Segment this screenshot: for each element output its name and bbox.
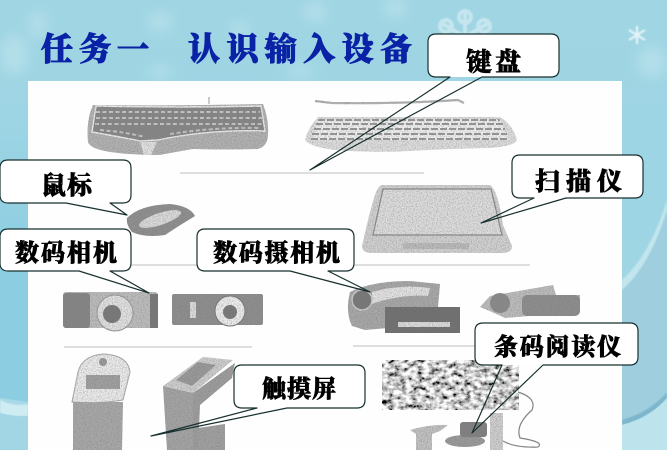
callout: 触摸屏: 触摸屏 [262, 375, 336, 403]
illustration: compact camera 1 [63, 292, 158, 331]
callout: 数码摄相机: 数码摄相机 [213, 239, 340, 267]
illustration: ergonomic keyboard [88, 97, 268, 155]
illustration: camcorder 1 [348, 281, 460, 333]
callout: 条码阅读仪 [472, 323, 638, 433]
illustration: scanner [362, 185, 512, 253]
title: 任务一 [41, 31, 149, 67]
illustration: camcorder 2 [480, 285, 580, 318]
callout: 条码阅读仪: 条码阅读仪 [494, 334, 621, 361]
illustration: standard keyboard [305, 100, 517, 152]
illustration: compact camera 2 [172, 294, 263, 326]
callout: 数码相机 [0, 229, 149, 293]
illustration: mouse [127, 204, 195, 236]
icon: small star [629, 26, 645, 44]
callout: 鼠标: 鼠标 [41, 171, 95, 200]
callout: 扫描仪: 扫描仪 [535, 167, 622, 196]
title [41, 31, 412, 67]
illustration: store photo [382, 360, 519, 410]
callout: 鼠标 [0, 160, 131, 215]
callout: 触摸屏 [151, 365, 365, 436]
callout: 键盘: 键盘 [466, 48, 521, 77]
icon: snowflake [440, 11, 490, 60]
illustration: kiosk 1 [72, 354, 130, 450]
callout: 扫描仪 [481, 155, 643, 223]
illustration: barcode scanners [410, 392, 540, 450]
callout: 数码相机: 数码相机 [15, 239, 117, 267]
title: 认识输入设备 [188, 31, 412, 67]
panel: worksheet [28, 81, 622, 450]
callout: 键盘 [310, 34, 559, 170]
callout: 数码摄相机 [197, 229, 370, 292]
illustration: kiosk 2 [163, 357, 235, 450]
